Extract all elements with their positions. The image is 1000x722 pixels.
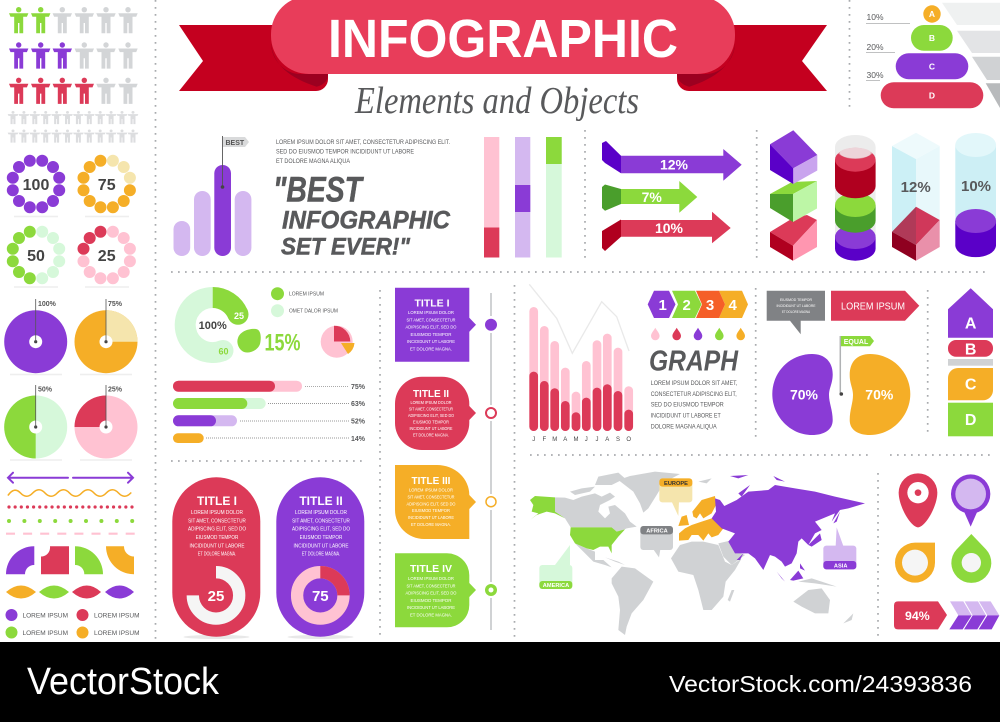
panel: title I pill: EIUSMOD TEMPOR [196,535,239,541]
donut legend: LOREM IPSUM [289,292,324,298]
timeline card II: TITLE II [413,389,449,400]
colour legend: LOREM IPSUM [94,612,140,620]
pin: orange drop [895,543,935,583]
stacked vertical bars [484,137,562,258]
dot ring 50: 50 [27,248,45,265]
map callout: asia: ASIA [834,563,847,569]
pie 50 percent: 50% [38,386,53,394]
numbered hexagons [648,291,748,318]
graph text block: LOREM IPSUM DOLOR SIT AMET, [651,381,738,387]
dot ring 25: 25 [98,248,116,265]
quote heading [273,170,451,260]
quote heading: INFOGRAPHIC [282,206,451,234]
dot ring 100: 100 [23,177,49,194]
isometric cube stack [770,130,817,261]
tag: 94 percent [894,601,947,629]
pyramid chart: A [929,9,935,19]
numbered hexagons: 4 [729,297,738,314]
map callout: europe: EUROPE [664,481,688,487]
monthly bar chart: J [585,437,588,443]
bean charts: EQUAL [844,339,869,346]
letter blocks: A [965,316,977,332]
map callout: asia [823,527,856,569]
progress bars: 75% [351,384,366,391]
colour legend: LOREM IPSUM [94,630,140,637]
timeline card III: TITLE III [412,476,451,487]
glass box 12 percent [892,133,940,261]
donut legend: OMET DALOR IPSUM [289,308,338,314]
letter blocks: B [965,342,976,358]
bean charts: 70% [865,386,894,402]
dot ring 25 [84,232,130,278]
panel: title II pill: TITLE II [299,494,343,508]
panel: title II pill: INCIDIDUNT UT LABORE [294,543,349,549]
monthly bar chart: J [596,437,598,443]
graph text block [651,381,738,431]
ribbon arrows: 7% [642,189,662,205]
pie 75 percent [74,299,138,373]
colour legend [6,609,140,638]
timeline card II: LOREM IPSUM DOLOR [410,400,452,405]
timeline card III: SIT AMET, CONSECTETUR [408,494,455,499]
dot ring 75 [84,161,130,207]
monthly bar chart: F [542,437,546,443]
timeline card II [395,377,476,450]
quarter shapes [6,546,134,574]
pie 50 percent [4,385,67,458]
pie 100 percent: 100% [38,301,57,308]
monthly bar chart: M [552,437,557,443]
grey speech callout: EIUSMOD TEMPOR [780,297,812,302]
progress bars: 63% [351,401,366,408]
timeline card III: ADIPISCING ELIT, SED DO [406,501,456,506]
pyramid chart: D [929,90,935,100]
pie 100 percent [4,299,67,373]
graph text block: INCIDIDUNT UT LABORE ET [651,414,721,420]
map: asia [712,475,865,582]
timeline card III: LOREM IPSUM DOLOR [409,488,454,492]
ribbon arrows: 10% [655,220,684,236]
timeline card I: EIUSMOD TEMPOR [410,332,452,337]
pie 25 percent [74,385,138,458]
timeline card II: ET DOLORE MAGNA. [413,432,449,438]
numbered hexagons: 2 [683,297,691,314]
grey speech callout: ET DOLORE MAGNA [782,309,810,314]
grey speech callout [767,291,825,334]
timeline card II: EIUSMOD TEMPOR [413,420,449,424]
letter blocks [948,288,993,436]
timeline card IV [395,553,476,627]
timeline card I: ET DOLORE MAGNA. [410,346,452,352]
top bar chart with flag: BEST [226,140,245,147]
timeline card III: ET DOLORE MAGNA. [411,522,451,527]
map callout: africa: AFRICA [646,529,668,535]
panel: title II pill: 75 [312,588,329,605]
timeline card I: ADIPISCING ELIT, SED DO [406,325,457,330]
monthly bar chart: O [626,437,631,443]
dot ring 100 [13,161,59,207]
timeline card IV: SIT AMET, CONSECTETUR [406,583,456,588]
panel: title II pill [276,477,364,639]
panel: title I pill: TITLE I [197,494,237,508]
timeline card IV: ADIPISCING ELIT, SED DO [406,591,457,596]
quote heading: SET EVER!" [281,234,411,260]
graph heading: GRAPH [649,346,739,378]
timeline card II: INCIDIDUNT UT LABORE [410,426,453,431]
lorem text block: SED DO EIUSMOD TEMPOR INCIDIDUNT UT LABORE [276,150,414,156]
monthly bar chart: A [605,437,609,443]
colour legend: LOREM IPSUM [22,630,68,637]
monthly bar chart: S [616,437,620,443]
top bar chart with flag [174,136,251,256]
pyramid chart: 10% [866,12,884,22]
footer logo: VectorStock [27,661,220,703]
progress bars: 14% [351,436,366,443]
pyramid chart: 20% [866,42,884,52]
colour legend: LOREM IPSUM [22,612,68,620]
timeline card I: TITLE I [414,298,450,310]
chevron arrows [949,601,999,629]
bean charts: 70% [790,386,819,402]
map pins and tags [894,473,999,629]
timeline card IV: EIUSMOD TEMPOR [410,598,452,603]
timeline card III: EIUSMOD TEMPOR [412,508,451,513]
numbered hexagons: 3 [706,297,714,314]
line styles [6,473,135,534]
ribbon arrows: 12% [660,156,689,172]
glass box 12 percent: 12% [901,179,931,196]
map callout: africa [640,526,673,557]
graph text block: SED DO EIUSMOD TEMPOR [651,403,724,409]
footer bar [0,642,1000,722]
quote heading: "BEST [273,170,364,210]
pyramid chart: B [929,33,935,43]
panel: title I pill: ET DOLORE MAGNA. [198,552,236,558]
lens shapes [6,586,134,598]
world map [530,472,865,635]
title text: INFOGRAPHIC [328,9,678,69]
ribbon arrows [602,141,742,251]
panel: title I pill: ADIPISCING ELIT, SED DO [188,527,246,533]
panel: title I pill: LOREM IPSUM DOLOR [191,510,243,516]
timeline card IV: INCIDIDUNT UT LABORE [407,605,455,610]
map: america [530,496,625,553]
red arrow tag [831,291,919,321]
colour drops [651,328,745,340]
pyramid chart: C [929,62,935,72]
panel: title I pill: SIT AMET, CONSECTETUR [188,518,246,524]
panel: title I pill: 25 [208,588,224,605]
progress bars: 52% [351,418,366,426]
red arrow tag: LOREM IPSUM [841,300,905,312]
monthly bar chart: M [574,437,578,443]
timeline card II: ADIPISCING ELIT, SED DO [408,413,454,418]
timeline card III [395,465,476,539]
pin: purple circle [951,474,990,527]
dot ring 75: 75 [98,177,116,194]
timeline card I: SIT AMET, CONSECTETUR [406,317,456,322]
timeline card II: SIT AMET, CONSECTETUR [409,406,453,412]
pin: green drop [951,534,991,583]
timeline axis [485,293,497,630]
bean charts [772,336,910,435]
panel: title II pill: SIT AMET, CONSECTETUR [292,518,350,524]
timeline card I [395,288,476,362]
donut chart: 100% [199,320,227,332]
timeline card IV: ET DOLORE MAGNA. [410,612,452,618]
small pie [321,326,354,358]
graph text block: DOLORE MAGNA ALIQUA [651,425,717,431]
numbered hexagons: 1 [659,297,667,314]
timeline card IV: LOREM IPSUM DOLOR [408,576,455,581]
pyramid chart: 30% [866,70,884,80]
map callout: america [539,545,572,589]
pie 25 percent: 25% [108,386,123,394]
monthly bar chart: A [563,437,567,443]
panel: title I pill: INCIDIDUNT UT LABORE [190,543,245,549]
donut chart: 25 [234,311,244,321]
layered cylinder [835,135,876,261]
grey speech callout: INCIDIDUNT UT LABORE [776,303,816,308]
subtitle: Elements and Objects [354,80,639,122]
lorem text block: LOREM IPSUM DOLOR SIT AMET, CONSECTETUR ADIPISCING ELIT. [276,140,450,146]
timeline card I: INCIDIDUNT UT LABORE [407,339,455,344]
title banner [179,0,827,91]
people icon rows [8,7,138,143]
panel: title II pill: EIUSMOD TEMPOR [300,535,343,541]
map callout: america: AMERICA [543,583,569,589]
tag: 94 percent: 94% [905,609,930,623]
map land: grey continents [555,472,853,635]
progress bars [173,381,366,443]
glass cylinder 10 percent: 10% [961,178,991,195]
letter blocks: C [965,376,977,394]
panel: title II pill: ADIPISCING ELIT, SED DO [292,527,350,533]
panel: title I pill [172,477,260,639]
pie 75 percent: 75% [108,301,123,308]
donut chart [185,298,248,361]
green blob 15 percent: 15% [264,330,300,356]
donut legend [271,287,338,317]
donut chart: 60 [218,346,229,356]
monthly bar chart [529,284,631,443]
lorem text block [276,140,450,165]
green blob 15 percent [237,329,300,356]
letter blocks: D [965,412,976,429]
map: europe [678,496,723,541]
footer url: VectorStock.com/24393836 [669,671,972,697]
panel: title II pill: LOREM IPSUM DOLOR [295,510,347,516]
map callout: europe [659,478,692,516]
pin: red target [899,473,937,527]
monthly bar chart: J [532,437,535,443]
glass cylinder 10 percent [955,133,996,257]
timeline card III: INCIDIDUNT UT LABORE [408,515,454,520]
lorem text block: ET DOLORE MAGNA ALIQUA [276,159,350,165]
dot ring 50 [13,232,59,278]
timeline card IV: TITLE IV [410,563,452,575]
graph text block: CONSECTETUR ADIPISCING ELIT, [651,392,737,398]
pyramid chart [866,3,1000,108]
timeline card I: LOREM IPSUM DOLOR [408,310,455,315]
panel: title II pill: ET DOLORE MAGNA. [302,552,340,558]
